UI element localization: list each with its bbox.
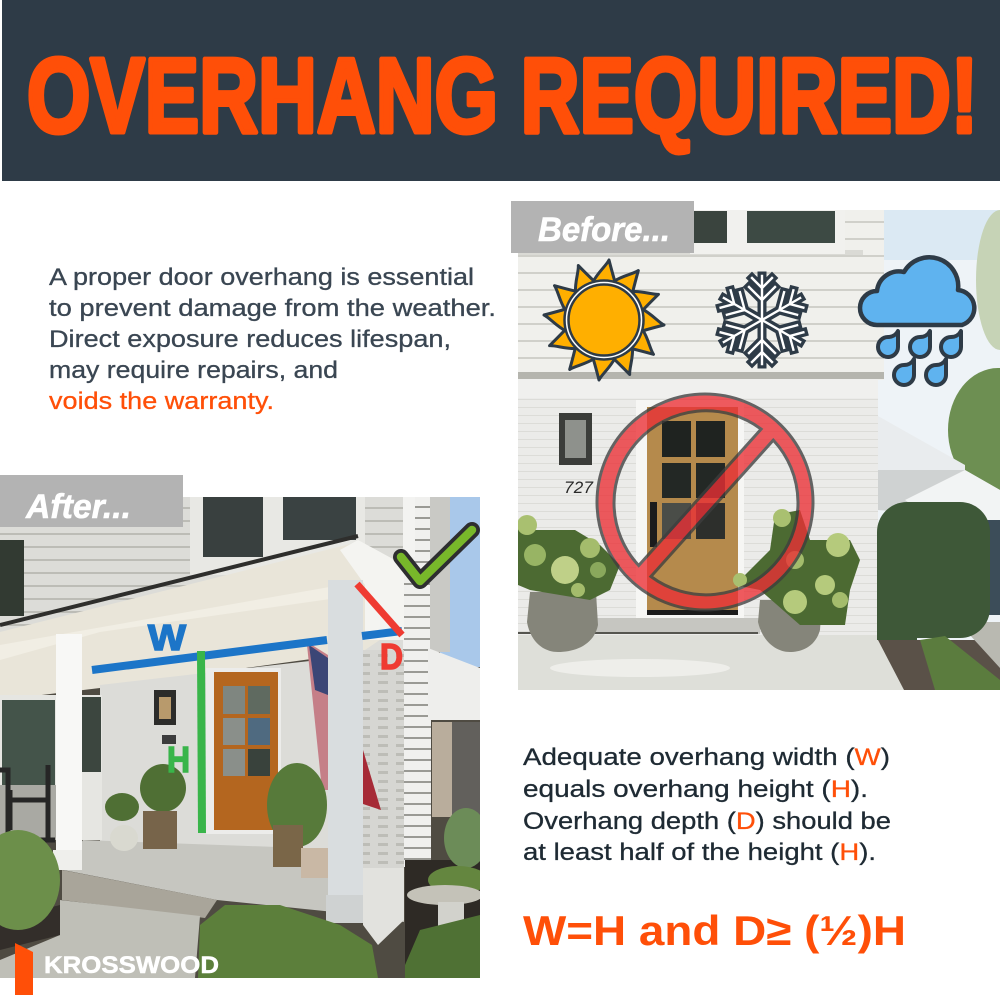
intro paragraph: A proper door overhang is essential — [49, 264, 474, 291]
intro paragraph: may require repairs, and — [49, 357, 338, 384]
label W: W — [148, 617, 186, 658]
neighbouring building — [428, 648, 480, 817]
line: overhang width — [92, 631, 402, 670]
panel: after photo — [0, 497, 488, 978]
icon: check mark — [401, 530, 472, 581]
right column — [326, 580, 364, 923]
left planter — [517, 515, 620, 652]
icon: snowflake — [717, 276, 807, 364]
formula: W=H and D≥ (½)H — [523, 907, 906, 954]
label D: D — [380, 636, 403, 677]
title banner — [2, 0, 1000, 181]
explanation text: at least half of the height ( H). — [523, 839, 876, 866]
sky — [440, 497, 480, 667]
intro paragraph: voids the warranty. — [49, 388, 274, 415]
bottom shrub — [198, 905, 378, 978]
left planters — [105, 764, 186, 851]
line: overhang depth — [357, 584, 402, 635]
left column — [53, 634, 82, 870]
explanation text — [523, 744, 891, 866]
left porch window — [0, 695, 102, 840]
after label: After... — [25, 488, 131, 526]
trees behind house — [878, 210, 1000, 525]
panel: before photo — [517, 210, 1000, 690]
roof edge — [0, 536, 358, 625]
left shrub — [0, 830, 60, 950]
upper siding wall — [0, 497, 405, 657]
right planter — [733, 509, 860, 652]
house number: 727 — [564, 478, 594, 497]
right shrubs and bench — [405, 808, 488, 978]
line: overhang height — [201, 651, 202, 833]
porch side wall — [363, 868, 404, 945]
door — [206, 668, 281, 834]
before label — [511, 201, 694, 253]
icon: prohibition sign — [597, 394, 813, 610]
logo — [15, 943, 219, 995]
step and concrete — [518, 618, 904, 690]
lower brick wall — [518, 379, 878, 635]
right planters — [267, 763, 328, 878]
icon: rain cloud — [860, 257, 974, 385]
explanation text: Adequate overhang width ( W) — [523, 744, 890, 771]
door — [636, 400, 744, 618]
logo: KROSSWOOD — [44, 952, 219, 979]
right corner siding — [403, 497, 450, 867]
intro paragraph: Direct exposure reduces lifespan, — [49, 326, 451, 353]
rocking chairs — [0, 765, 55, 840]
icon: sun — [544, 260, 664, 380]
porch floor — [63, 840, 404, 922]
brick wall — [100, 650, 404, 870]
beam — [0, 588, 328, 660]
intro paragraph — [49, 264, 496, 415]
explanation text: Overhang depth ( D) should be — [523, 808, 891, 835]
porch ceiling — [0, 542, 402, 700]
upper siding wall — [518, 210, 884, 380]
label H: H — [167, 739, 190, 780]
explanation text: equals overhang height ( H). — [523, 776, 868, 803]
intro paragraph: to prevent damage from the weather. — [49, 295, 496, 322]
hedge and driveway — [877, 502, 1000, 690]
steps — [0, 870, 217, 978]
wall lantern — [559, 413, 592, 465]
lantern and number — [154, 690, 176, 744]
before label: Before... — [538, 211, 670, 249]
after label — [0, 475, 183, 527]
american flag — [307, 645, 381, 810]
corner bracket — [340, 540, 404, 640]
